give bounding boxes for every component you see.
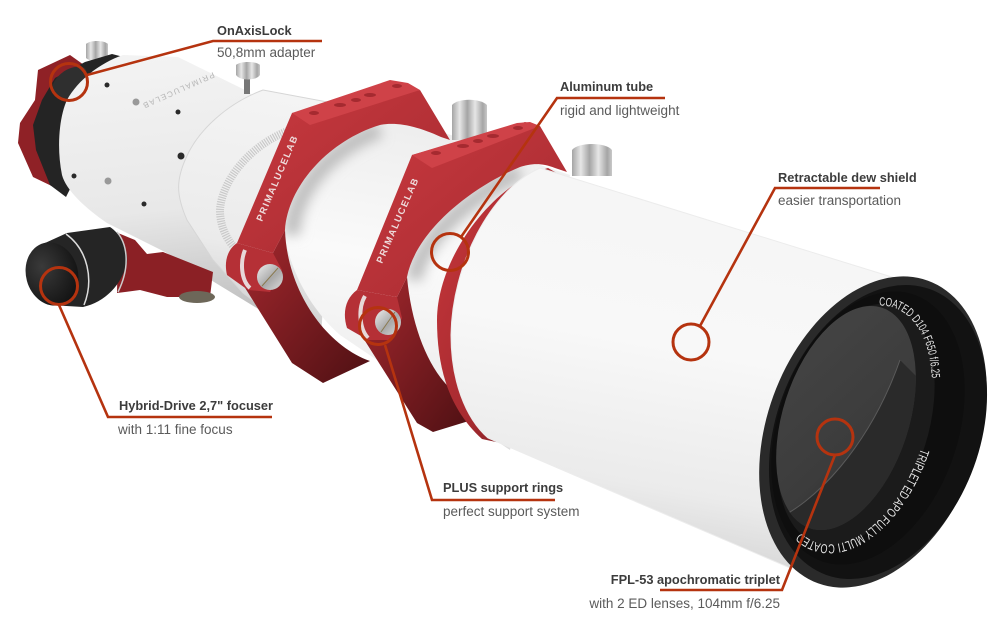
tube shadow rear (292, 130, 380, 235)
support ring: rear (226, 80, 450, 383)
focuser knob (19, 227, 127, 312)
focuser body (59, 55, 290, 310)
thumbscrew: front ring (572, 144, 612, 176)
callout: PLUS support rings: perfect support system (443, 504, 580, 519)
lens engraving: TRIPLET ED APO FULLY MULTI COATED (796, 450, 930, 554)
callout: Retractable dew shield: Retractable dew shield (778, 170, 917, 185)
callout: Hybrid-Drive focuser (40, 268, 273, 437)
OnAxisLock knurled grip (53, 67, 88, 101)
callout: Aluminum tube: rigid and lightweight (560, 103, 680, 118)
lens lower reflection (790, 360, 916, 530)
main tube (283, 112, 570, 450)
rear red focuser collar (18, 55, 84, 190)
callout: OnAxisLock (50, 23, 322, 100)
support ring: front (345, 122, 567, 432)
thumbscrew: rear ring (452, 100, 487, 140)
ring logo: PRIMALUCELAB (375, 176, 422, 265)
retractable dew shield (451, 168, 895, 568)
ring logo: PRIMALUCELAB (255, 133, 301, 223)
ring screw (257, 264, 283, 290)
thumbscrew: rear (86, 41, 108, 72)
hinge (345, 290, 402, 340)
callout: Aluminum tube (432, 79, 680, 270)
lens glass (749, 284, 963, 566)
ring screw (375, 309, 401, 335)
callout: PLUS support rings (360, 308, 580, 519)
focuser knob bracket (117, 233, 213, 297)
engraved body logo: PRIMALUCELAB (140, 70, 216, 110)
callout: PLUS support rings: PLUS support rings (443, 480, 563, 495)
tube shadow front (414, 172, 520, 280)
callout: Aluminum tube: Aluminum tube (560, 79, 653, 94)
callout: OnAxisLock: OnAxisLock (217, 23, 293, 38)
callout: Hybrid-Drive focuser: Hybrid-Drive 2,7" focuser (119, 398, 273, 413)
callout: Retractable dew shield (673, 170, 917, 360)
callout: FPL-53 triplet (588, 419, 853, 611)
objective section (179, 90, 333, 350)
callout: OnAxisLock: 50,8mm adapter (217, 45, 316, 60)
dew shield flange (437, 168, 560, 445)
hinge (226, 243, 282, 292)
body holes (72, 82, 184, 206)
objective cell (759, 276, 988, 588)
lens engraving (796, 297, 940, 554)
callout: FPL-53 triplet: with 2 ED lenses, 104mm f/6.25 (588, 596, 780, 611)
callout: FPL-53 triplet: FPL-53 apochromatic triplet (611, 572, 781, 587)
thumbscrew: body (236, 62, 260, 94)
knurled ring (220, 130, 290, 250)
callout: Hybrid-Drive focuser: with 1:11 fine focus (117, 422, 233, 437)
mounting foot (179, 291, 215, 303)
lens engraving: COATED D104 F650 f/6.25 (880, 297, 940, 378)
callout: Retractable dew shield: easier transportation (778, 193, 901, 208)
black focuser ring (33, 54, 135, 197)
